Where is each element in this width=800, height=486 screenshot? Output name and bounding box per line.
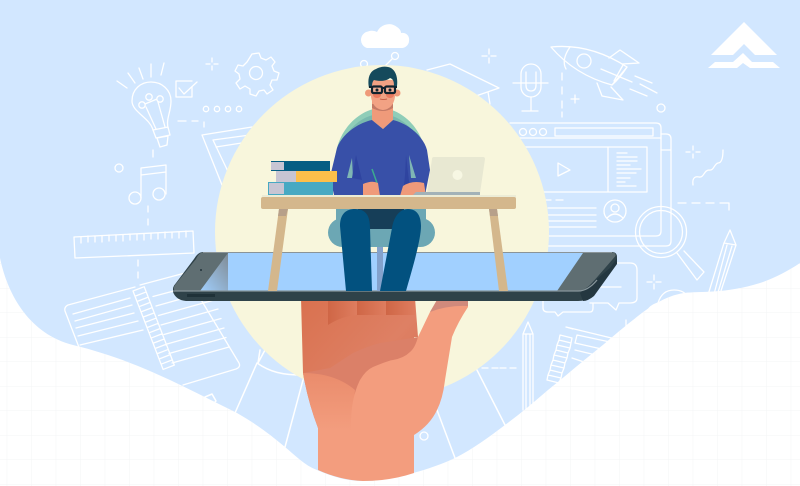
icon: sparkle lower xyxy=(647,275,661,289)
phone face xyxy=(174,252,616,291)
icon: light bulb xyxy=(117,63,171,147)
icon: rocket xyxy=(551,46,657,100)
icon: ruler xyxy=(74,231,194,258)
glasses xyxy=(372,86,395,93)
icon: cloud connector xyxy=(360,52,398,68)
dashed connector xyxy=(678,203,729,210)
table top xyxy=(261,195,516,209)
fingers xyxy=(328,301,357,325)
icon: gear xyxy=(235,53,279,96)
icon: graduation cap xyxy=(427,64,499,108)
icon: fan of pages xyxy=(205,350,505,458)
pen xyxy=(372,169,377,183)
thumb and wrist xyxy=(318,300,468,481)
icon: squiggle xyxy=(686,146,723,185)
icon: magnifier xyxy=(636,206,704,280)
icon: rocket extras xyxy=(562,73,665,117)
table legs xyxy=(268,209,508,291)
icon: tablet behind circle xyxy=(202,127,252,185)
icon: chat bubbles xyxy=(543,263,637,316)
icon: checkbox xyxy=(176,81,197,97)
hand holding phone xyxy=(301,298,468,481)
laptop xyxy=(413,157,485,195)
sweater xyxy=(330,120,430,195)
icon: microphone xyxy=(513,64,548,111)
phone edge highlights xyxy=(173,280,597,291)
jeans xyxy=(340,209,421,291)
icon: cloud outline xyxy=(647,290,688,312)
screen glare xyxy=(200,253,228,291)
icon: pencil right xyxy=(708,230,736,300)
smartphone xyxy=(173,252,617,301)
icon: small circle xyxy=(420,432,428,440)
notebook spine xyxy=(133,287,174,369)
hands xyxy=(363,182,426,196)
blush xyxy=(373,92,381,98)
logo xyxy=(708,22,780,68)
camera dot xyxy=(200,269,202,271)
icon: music note xyxy=(129,165,166,204)
icon: browser windows xyxy=(510,123,671,246)
palm midtone xyxy=(303,337,418,392)
icon: open notebook xyxy=(65,273,240,385)
sweater gaps xyxy=(347,155,416,178)
books xyxy=(268,161,337,195)
palm lower xyxy=(303,373,355,470)
icon: sparkle xyxy=(206,58,218,70)
phone screen xyxy=(228,253,583,291)
thumb tip xyxy=(430,300,468,312)
neck xyxy=(372,100,393,129)
icon: spiral notepad xyxy=(547,320,628,383)
speaker xyxy=(187,294,215,297)
person at desk xyxy=(261,67,516,291)
line art doodles xyxy=(65,46,736,458)
bottom white wave with grid xyxy=(0,258,800,486)
solid cloud xyxy=(361,24,409,48)
phone side xyxy=(580,258,617,301)
dots and dashes xyxy=(115,106,242,278)
icon: pencil lower xyxy=(482,322,533,410)
cream circle xyxy=(215,65,549,399)
upper palm xyxy=(301,298,418,430)
head xyxy=(365,67,400,110)
hair xyxy=(368,67,397,88)
sweater folds xyxy=(352,155,410,195)
chair xyxy=(328,108,435,291)
icon: sparkle top xyxy=(482,49,496,63)
